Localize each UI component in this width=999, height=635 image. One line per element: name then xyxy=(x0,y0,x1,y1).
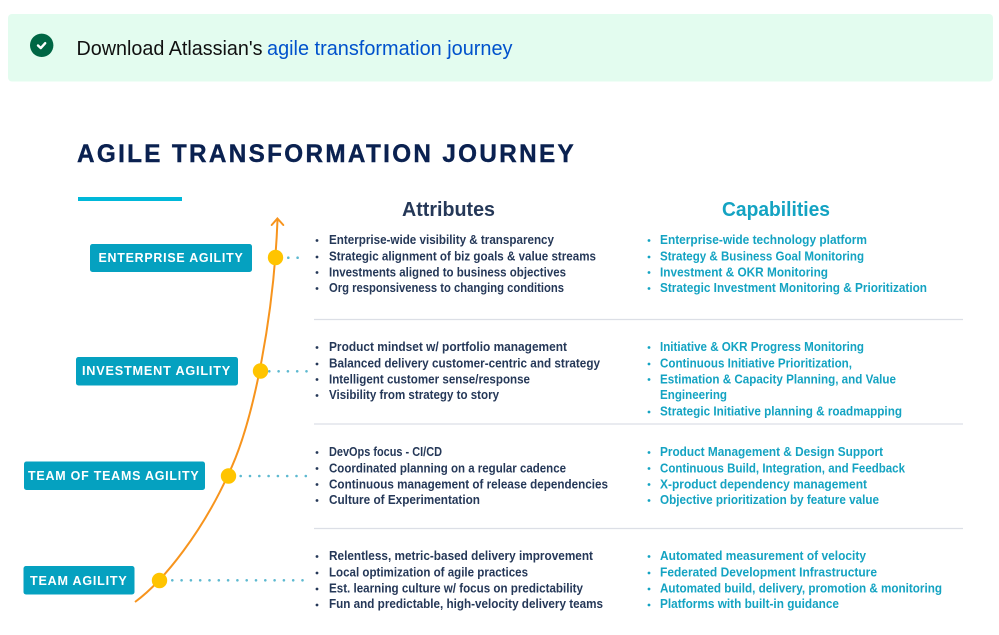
capabilities: investment: Estimation & Capacity Planning, and Value xyxy=(660,372,896,386)
label: investment agility xyxy=(76,357,238,386)
capabilities: enterprise: Enterprise-wide technology platform xyxy=(660,232,867,247)
label: team agility xyxy=(24,566,134,594)
capabilities: enterprise: Strategic Investment Monitoring & Prioritization xyxy=(660,280,927,295)
heading: capabilities: Capabilities xyxy=(722,199,830,221)
banner text: Download Atlassian's xyxy=(76,38,262,60)
attributes: enterprise: Investments aligned to business objectives xyxy=(329,264,566,280)
label: team agility: TEAM AGILITY xyxy=(30,573,128,588)
title underline xyxy=(78,197,182,201)
attributes: team of teams: DevOps focus - CI/CD xyxy=(329,444,442,459)
attributes: enterprise: Strategic alignment of biz goals & value streams xyxy=(329,248,596,264)
attributes: enterprise: Enterprise-wide visibility & transparency xyxy=(329,232,555,247)
attributes: team: Relentless, metric-based delivery improvement xyxy=(329,548,594,563)
capabilities: team of teams: Objective prioritization by feature value xyxy=(660,492,879,507)
capabilities: team: Federated Development Infrastructure xyxy=(660,564,877,580)
label: team of teams agility xyxy=(24,462,205,490)
capabilities: investment: Continuous Initiative Prioritization, xyxy=(660,356,852,370)
attributes: investment xyxy=(316,339,601,402)
capabilities: team of teams: Product Management & Design Support xyxy=(660,444,884,459)
attributes: enterprise xyxy=(316,232,596,295)
attributes: investment: Intelligent customer sense/response xyxy=(329,372,530,386)
capabilities: team of teams xyxy=(648,444,906,507)
attributes: enterprise: Org responsiveness to changing conditions xyxy=(329,280,564,295)
capabilities: team: Platforms with built-in guidance xyxy=(660,596,839,611)
growth curve arrow xyxy=(135,218,283,602)
attributes: team xyxy=(316,548,603,611)
attributes: team of teams: Coordinated planning on a regular cadence xyxy=(329,460,566,476)
banner xyxy=(8,14,993,82)
attributes: team: Fun and predictable, high-velocity delivery teams xyxy=(329,596,603,611)
attributes: team: Local optimization of agile practices xyxy=(329,564,528,580)
capabilities: enterprise xyxy=(648,232,927,295)
label: enterprise agility xyxy=(90,244,252,272)
attributes: team: Est. learning culture w/ focus on predictability xyxy=(329,580,584,596)
label: enterprise agility: ENTERPRISE AGILITY xyxy=(98,250,244,265)
capabilities: investment xyxy=(648,339,902,418)
label: team of teams agility: TEAM OF TEAMS AGILITY xyxy=(28,468,200,483)
capabilities: team xyxy=(648,548,942,611)
capabilities: enterprise: Investment & OKR Monitoring xyxy=(660,264,828,280)
attributes: investment: Visibility from strategy to story xyxy=(329,387,500,402)
attributes: team of teams: Culture of Experimentation xyxy=(329,492,480,507)
attributes: investment: Balanced delivery customer-centric and strategy xyxy=(329,356,601,370)
milestone dots xyxy=(152,250,283,588)
icon: success check xyxy=(30,34,53,57)
attributes: team of teams: Continuous management of release dependencies xyxy=(329,476,608,492)
capabilities: team: Automated measurement of velocity xyxy=(660,548,867,563)
dotted connectors xyxy=(172,258,307,580)
capabilities: investment: Initiative & OKR Progress Monitoring xyxy=(660,339,864,354)
capabilities: investment: Engineering xyxy=(660,387,727,402)
title: AGILE TRANSFORMATION JOURNEY xyxy=(77,140,576,168)
capabilities: investment: Strategic Initiative planning & roadmapping xyxy=(660,404,902,418)
label: investment agility: INVESTMENT AGILITY xyxy=(82,363,231,378)
banner link: agile transformation journey xyxy=(267,38,512,60)
capabilities: team of teams: X-product dependency management xyxy=(660,476,868,492)
capabilities: enterprise: Strategy & Business Goal Monitoring xyxy=(660,248,864,264)
attributes: investment: Product mindset w/ portfolio management xyxy=(329,339,568,354)
heading: attributes: Attributes xyxy=(402,199,495,221)
capabilities: team of teams: Continuous Build, Integration, and Feedback xyxy=(660,460,906,476)
capabilities: team: Automated build, delivery, promotion & monitoring xyxy=(660,580,942,596)
attributes: team of teams xyxy=(316,444,608,507)
